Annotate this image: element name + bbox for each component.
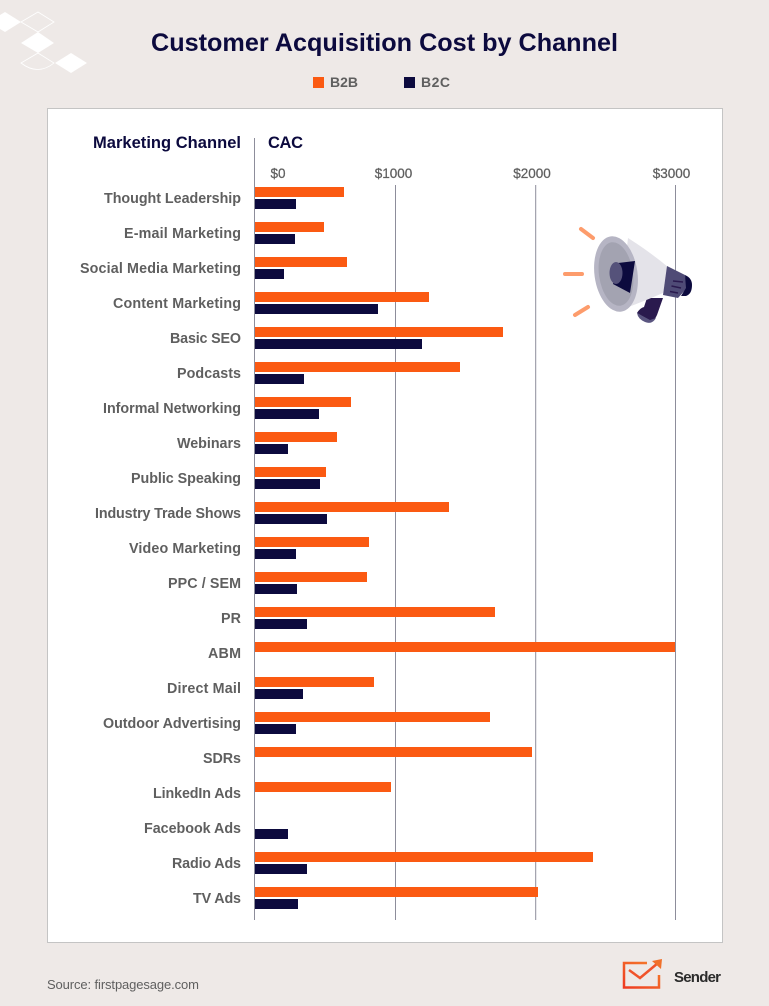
axis ticks: $1000 [375,166,412,181]
channel labels: Thought Leadership [104,191,241,207]
channel labels: TV Ads [193,891,241,907]
channel labels: Informal Networking [103,401,241,417]
column headings: Marketing Channel [93,134,241,152]
channel labels: LinkedIn Ads [153,786,241,802]
channel labels: Content Marketing [113,296,241,312]
axis ticks: $3000 [653,166,690,181]
legend: B2C [421,74,450,90]
channel labels: Facebook Ads [144,821,241,837]
logo: Sender [624,959,721,988]
channel labels: PR [221,611,242,627]
channel labels: Social Media Marketing [80,261,241,277]
channel labels: Outdoor Advertising [103,716,241,732]
title: Customer Acquisition Cost by Channel [151,29,618,57]
decorative diamonds [0,12,87,73]
legend [313,74,450,90]
channel labels: Webinars [177,436,241,452]
channel labels: Industry Trade Shows [95,506,241,522]
axis ticks: $0 [270,166,286,181]
bars: B2B [255,187,675,897]
panel: chart card [48,108,722,942]
bars: B2C [255,199,422,909]
axis ticks [270,166,690,181]
channel labels: E-mail Marketing [124,226,241,242]
logo: Sender: Sender [674,969,721,986]
channel labels: ABM [208,646,241,662]
channel labels: SDRs [203,751,241,767]
channel labels: Public Speaking [131,471,241,487]
channel labels: Video Marketing [129,541,241,557]
channel labels: Podcasts [177,366,241,382]
grid lines [254,138,676,920]
source: Source: firstpagesage.com [47,977,199,992]
channel labels: Basic SEO [170,331,241,347]
channel labels: Direct Mail [167,681,241,697]
legend: B2B [330,74,358,90]
channel labels: Radio Ads [172,856,241,872]
icon: megaphone [565,229,692,323]
column headings: CAC [268,134,303,152]
channel labels [80,191,242,907]
axis ticks: $2000 [513,166,551,181]
channel labels: PPC / SEM [168,576,241,592]
